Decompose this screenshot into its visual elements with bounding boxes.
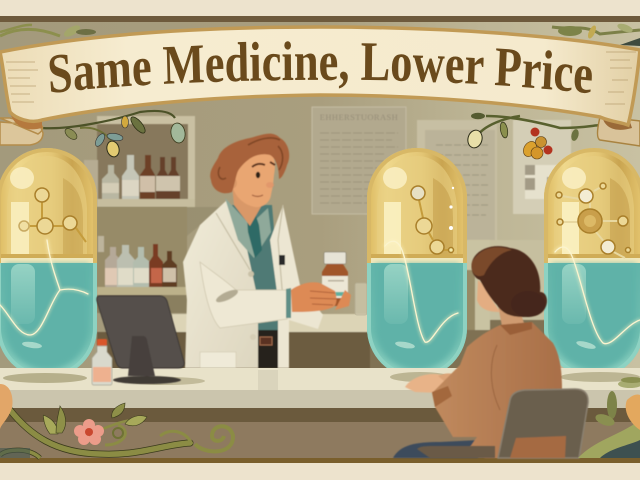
face hint (477, 280, 500, 312)
scroll texture (6, 52, 636, 104)
pill bottle (322, 252, 348, 306)
notice poster: EHHERSTUORASH (320, 112, 398, 122)
wall background (0, 17, 640, 369)
centre capsule molecule (411, 186, 454, 254)
neck (232, 185, 262, 226)
computer monitor (97, 296, 184, 384)
back counter (97, 240, 550, 369)
lab coat left body (183, 200, 258, 368)
title text: Same Medicine, Lower Price (50, 41, 592, 94)
sweater (432, 322, 562, 458)
shirt collar and tie (225, 198, 271, 258)
wall shadow (97, 207, 222, 290)
sleeve cuff (286, 288, 291, 318)
trousers (393, 440, 480, 458)
bottom right floral vine (578, 377, 640, 458)
hair (471, 246, 547, 317)
shirt and trousers (232, 205, 280, 368)
top cream border (0, 0, 640, 17)
neck (498, 305, 525, 332)
scroll body (0, 27, 640, 125)
left scroll curl (0, 118, 43, 145)
right capsule molecule (556, 183, 630, 258)
left capsule (0, 148, 97, 378)
small red-capped bottle (92, 339, 112, 385)
centre capsule wave line (385, 241, 458, 342)
hands on counter (405, 374, 452, 393)
lower right wall with window (468, 120, 571, 320)
patient (393, 246, 562, 458)
centre capsule (367, 148, 467, 378)
top right vine and berries (466, 22, 640, 159)
lab coat sleeve (200, 262, 287, 328)
hair (210, 134, 289, 193)
face (231, 154, 275, 207)
right capsule (544, 148, 640, 378)
flower (74, 419, 104, 445)
upper medicine shelf with bottles (84, 116, 195, 207)
pharmacist (183, 134, 351, 368)
right capsule wave line (555, 247, 640, 344)
chair (417, 389, 588, 458)
small jar behind counter (355, 283, 367, 315)
bottom left floral vine (0, 384, 233, 458)
lab coat right body (270, 205, 323, 368)
title banner scroll (0, 25, 640, 147)
top left vine and leaves (0, 23, 187, 158)
second notice (417, 120, 497, 250)
lower medicine shelf with bottles (97, 207, 187, 313)
left capsule wave line (0, 240, 88, 335)
front counter (0, 368, 640, 480)
top dark frame line (0, 16, 640, 22)
right scroll curl (598, 117, 640, 146)
eyes and mouth (256, 172, 260, 178)
left capsule molecule (19, 188, 86, 242)
hand holding bottle (291, 282, 336, 312)
notice poster (312, 107, 406, 214)
